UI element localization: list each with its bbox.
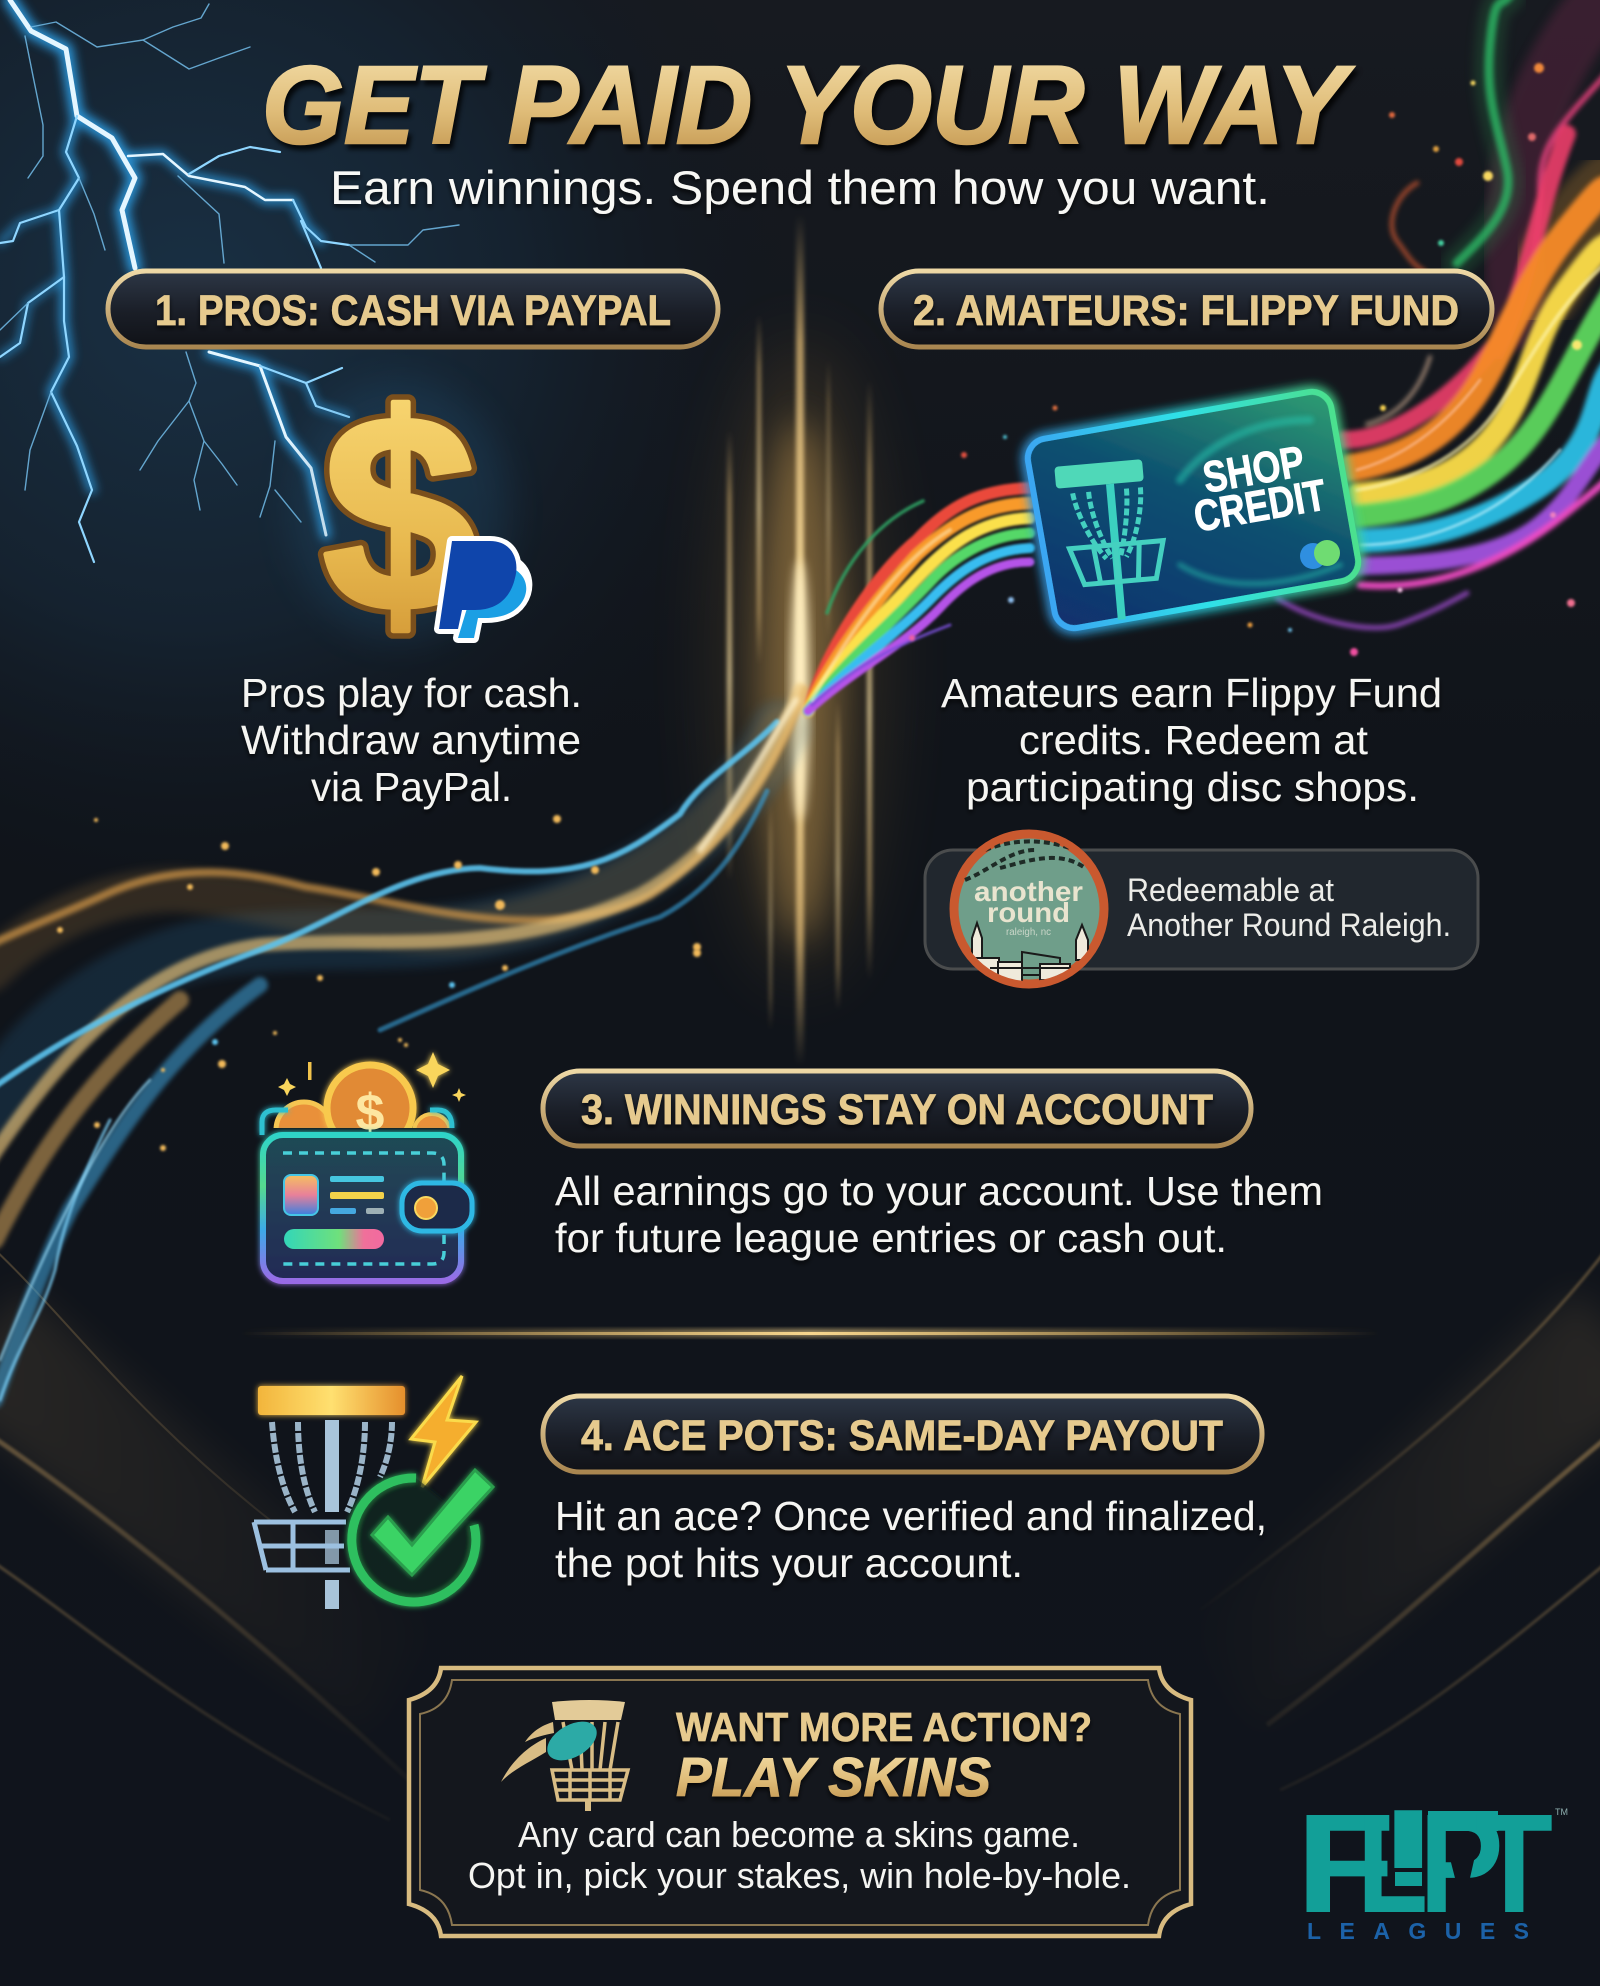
panel: pros heading pill: [108, 271, 718, 347]
logo: FLIPT Leagues: T: [1476, 1786, 1553, 1942]
rainbow stream right: [1277, 0, 1600, 628]
logo: FLIPT Leagues: F: [1296, 1785, 1395, 1943]
text: ace pots description: the pot hits your account.: [555, 1540, 1023, 1586]
lightning bolts: [0, 0, 459, 562]
title: GET PAID YOUR WAY: [262, 44, 1354, 167]
icon: gold dollar with PayPal badge: $: [322, 358, 478, 670]
text: redeemable note: Another Round Raleigh.: [1127, 907, 1451, 943]
icon: shop credit card: [1025, 389, 1361, 631]
text: redeemable note: [1127, 872, 1451, 943]
text: ace pots description: [555, 1493, 1267, 1586]
logo: FLIPT Leagues: I: [1382, 1793, 1435, 1886]
panel: winnings heading pill: 3. WINNINGS STAY ON ACCOUNT: [581, 1086, 1213, 1134]
panel: winnings heading pill: [543, 1071, 1251, 1146]
panel: play skins callout: [409, 1668, 1191, 1936]
divider: [240, 1329, 1380, 1337]
text: amateurs description: [941, 670, 1442, 810]
subtitle: Earn winnings. Spend them how you want.: [330, 161, 1270, 214]
text: winnings description: All earnings go to your account. Use them: [555, 1168, 1323, 1214]
panel: amateurs heading pill: 2. AMATEURS: FLIPPY FUND: [913, 287, 1459, 335]
text: pros description: [241, 670, 582, 810]
icon: basket with bolt and check: [254, 1376, 493, 1609]
text: play skins: PLAY SKINS: [676, 1746, 991, 1808]
text: pros description: Pros play for cash.: [241, 670, 582, 716]
text: want more action: WANT MORE ACTION?: [676, 1704, 1092, 1750]
logo: FLIPT Leagues: P: [1419, 1786, 1504, 1942]
panel: ace pots heading pill: 4. ACE POTS: SAME-DAY PAYOUT: [581, 1412, 1223, 1460]
icon: wallet with coins: $: [356, 1084, 385, 1142]
logo: FLIPT Leagues: L: [1357, 1786, 1428, 1943]
gold and blue energy stream: [0, 690, 805, 1400]
text: amateurs description: credits. Redeem at: [1019, 717, 1369, 763]
icon: wallet with coins: [262, 1052, 472, 1281]
panel: ace pots heading pill: [543, 1396, 1262, 1472]
gold sparkles: [57, 815, 701, 1151]
text: ace pots description: Hit an ace? Once verified and finalized,: [555, 1493, 1267, 1539]
icon: Another Round Raleigh badge: another: [974, 876, 1083, 907]
text: winnings description: [555, 1168, 1323, 1261]
text: redeemable note: Redeemable at: [1127, 872, 1334, 908]
text: skins description: [468, 1814, 1131, 1896]
icon: Another Round Raleigh badge: [954, 834, 1104, 984]
text: amateurs description: Amateurs earn Flippy Fund: [941, 670, 1442, 716]
title: GET PAID YOUR WAY: [265, 49, 1357, 172]
text: pros description: via PayPal.: [311, 764, 512, 810]
panel: amateurs heading pill: [881, 271, 1492, 347]
text: skins description: Any card can become a skins game.: [518, 1814, 1080, 1855]
icon: shop credit card: SHOP: [1199, 437, 1308, 503]
icon: Another Round Raleigh badge: round: [987, 897, 1070, 928]
panel: redeemable at Another Round: [925, 834, 1478, 984]
rainbow stream left: [808, 488, 1030, 711]
icon: disc entering basket: [501, 1700, 628, 1811]
text: pros description: Withdraw anytime: [241, 717, 581, 763]
text: skins description: Opt in, pick your stakes, win hole-by-hole.: [468, 1855, 1131, 1896]
icon: shop credit card: CREDIT: [1190, 470, 1330, 542]
background gold arcs: [0, 1245, 1600, 1820]
icon: gold dollar with PayPal badge: [290, 358, 527, 670]
icon: Another Round Raleigh badge: raleigh, nc: [1006, 927, 1051, 938]
logo: FLIPT Leagues: TM: [1555, 1807, 1568, 1817]
text: winnings description: for future league entries or cash out.: [555, 1215, 1227, 1261]
colored sparkles: [909, 63, 1582, 656]
logo: FLIPT Leagues: [1296, 1785, 1568, 1944]
icon: gold dollar with PayPal badge: $: [322, 358, 478, 670]
central golden light beam: [715, 215, 885, 1065]
panel: pros heading pill: 1. PROS: CASH VIA PAYPAL: [155, 287, 671, 335]
logo: FLIPT Leagues: LEAGUES: [1307, 1918, 1529, 1944]
text: amateurs description: participating disc shops.: [966, 764, 1419, 810]
